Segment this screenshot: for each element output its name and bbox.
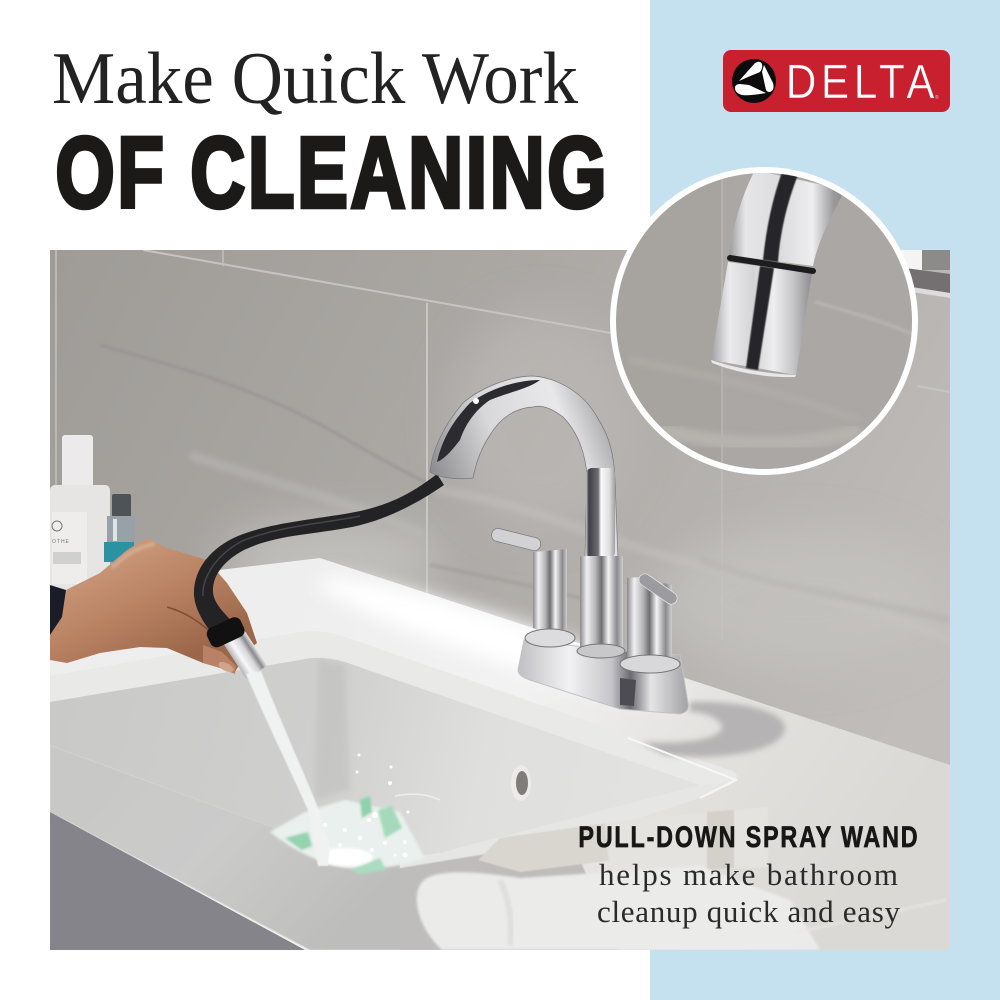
blue background panel [650, 0, 1000, 1000]
title [52, 38, 606, 228]
card band [707, 810, 734, 870]
white bottle [50, 435, 110, 590]
title line 1: Make Quick Work [52, 38, 578, 120]
registered mark: ® [935, 94, 939, 101]
bright right lip band [400, 782, 735, 868]
inset spout upper black stripe [763, 172, 798, 262]
small pump bottle [104, 494, 135, 562]
callout line 1: helps make bathroom [599, 857, 898, 892]
inset spout lower black stripe [746, 266, 774, 370]
spray head collar [206, 617, 245, 648]
base dark reflection [620, 678, 636, 706]
towel [417, 866, 820, 950]
bubbling water pool [270, 754, 440, 874]
inset spout lower [711, 262, 812, 375]
Delta logo [723, 50, 950, 112]
basin corner shading [318, 664, 348, 796]
spray head cylinder [223, 630, 267, 679]
knuckle highlights [112, 544, 155, 568]
spray hose [194, 474, 444, 636]
front counter lip [50, 745, 440, 950]
spout sparkle [473, 398, 479, 404]
towel folds [500, 880, 511, 945]
water stream [246, 671, 330, 866]
right handle lever [637, 571, 679, 607]
hose texture [203, 516, 360, 596]
faucet shadow on counter [640, 702, 785, 757]
faucet base [518, 640, 688, 714]
thumb nail [218, 662, 234, 672]
mirror edge top right [895, 250, 950, 298]
tile wall [50, 250, 950, 810]
center body [580, 556, 623, 648]
inset spout upper [729, 170, 845, 266]
counter reflection edge [793, 900, 946, 933]
spout top dark reflection [437, 380, 540, 462]
inset spout tip [711, 360, 796, 377]
callout heading: PULL-DOWN SPRAY WAND [578, 820, 918, 854]
right sink edge highlight [628, 738, 736, 798]
thumb tip over head [203, 645, 236, 674]
dark cabinet below counter [50, 812, 305, 950]
hand [50, 538, 257, 672]
sink rim [380, 655, 737, 785]
inset circle: spout detail [610, 167, 923, 475]
tile joints and veins [56, 250, 950, 640]
inset vein lines [630, 170, 923, 470]
left handle body [533, 549, 567, 632]
wall lighter patches [220, 310, 940, 670]
photo: bathroom sink with pull-down spray wand [50, 250, 950, 950]
arm sleeve [50, 585, 66, 635]
callout line 2: cleanup quick and easy [597, 894, 900, 929]
white counter glow [328, 570, 580, 666]
feature callout text [578, 820, 918, 929]
deck below sink toward towel [400, 854, 619, 950]
trim rings [525, 629, 680, 673]
logo mark [732, 59, 776, 103]
left handle lever [490, 527, 542, 552]
inset black ring [730, 258, 813, 271]
title line 2: OF CLEANING [55, 117, 606, 228]
folded card [606, 822, 614, 860]
overflow hole [511, 765, 531, 801]
faucet [430, 376, 688, 714]
countertop [50, 558, 950, 950]
folded cloth wedge [478, 822, 614, 872]
logo wordmark: DELTA [786, 54, 935, 109]
sink basin interior [50, 658, 600, 855]
right handle body [627, 577, 672, 664]
spout [430, 376, 618, 558]
spout tube reflection [586, 468, 615, 558]
white bottle: OTHE [52, 539, 70, 545]
finger crease [167, 607, 210, 632]
